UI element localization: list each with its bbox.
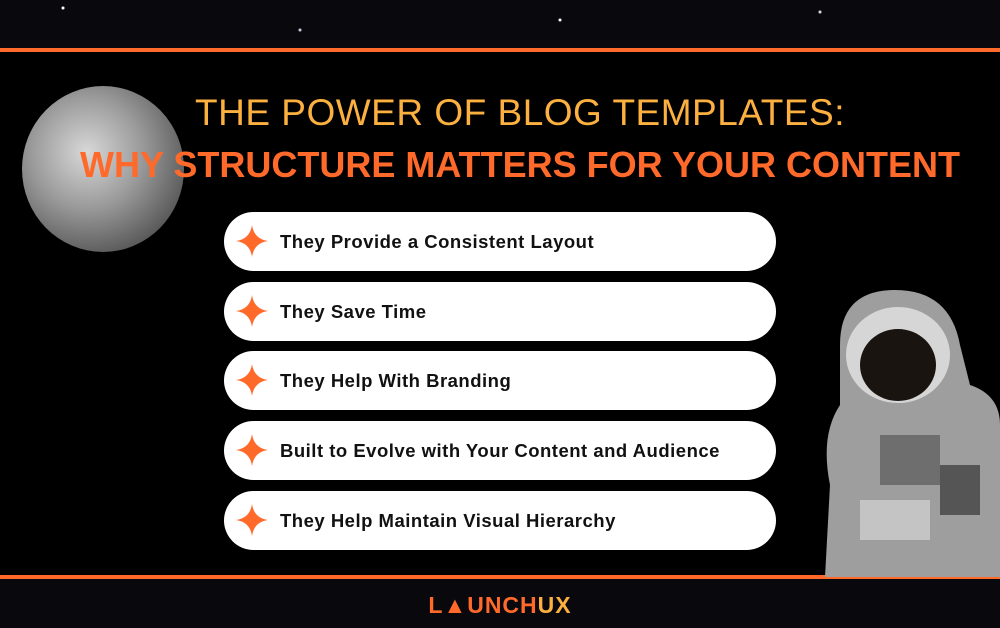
list item 5 [224, 491, 776, 550]
starfield top band [0, 0, 1000, 48]
title: WHY STRUCTURE MATTERS FOR YOUR CONTENT [80, 144, 960, 185]
list item 4: Built to Evolve with Your Content and Audience [280, 440, 720, 461]
list item 4 [224, 421, 776, 480]
list item 1: They Provide a Consistent Layout [280, 231, 594, 252]
icon: earth [22, 86, 184, 252]
title [80, 92, 960, 185]
list item 3 [224, 351, 776, 410]
starfield bottom band [0, 578, 1000, 628]
list item 2 [224, 282, 776, 341]
list item 3: They Help With Branding [280, 370, 511, 391]
list item 1 [224, 212, 776, 271]
title: THE POWER OF BLOG TEMPLATES: [195, 92, 845, 133]
list item 5: They Help Maintain Visual Hierarchy [280, 510, 616, 531]
list item 2: They Save Time [280, 301, 427, 322]
logo: L▲UNCHUX [428, 592, 572, 618]
icon: astronaut [825, 290, 1000, 577]
